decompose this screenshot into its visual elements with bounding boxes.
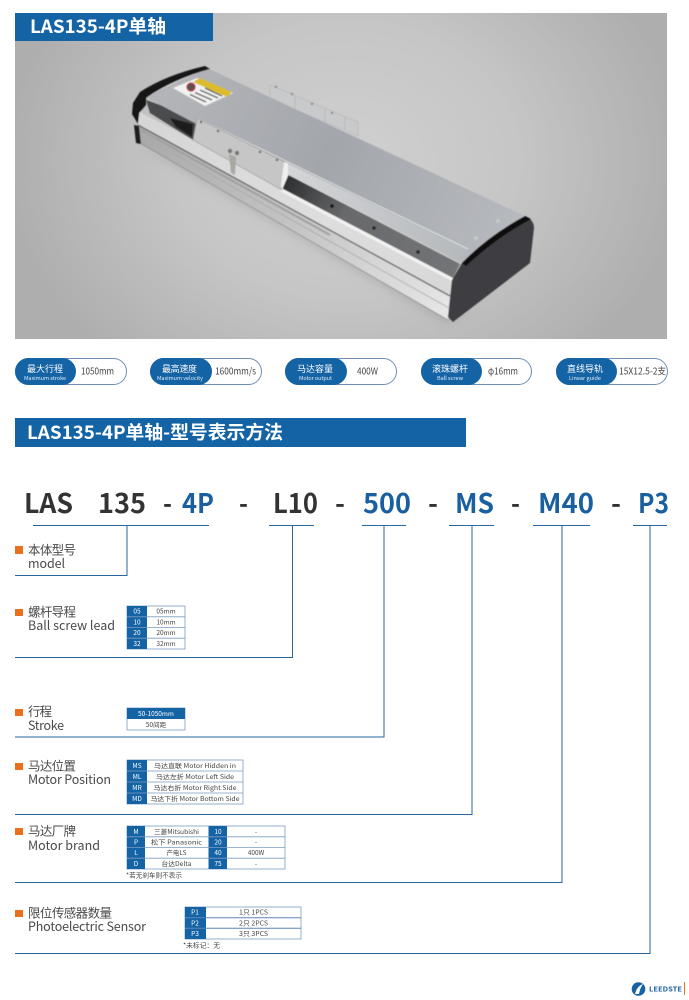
- spec pill: maximum stroke: [15, 358, 126, 385]
- table: ball screw lead: 10: [133, 616, 141, 626]
- spec pill: linear guide: Linear guide: [569, 374, 601, 382]
- table: motor brand: -: [255, 826, 257, 836]
- table: motor brand: 75: [214, 858, 222, 868]
- item: motor brand: [15, 820, 100, 854]
- item: motor position: 马达位置: [28, 756, 76, 774]
- spec pill: maximum velocity: 1600mm/s: [215, 364, 256, 378]
- leader line: ball screw lead: [15, 526, 314, 658]
- table: motor position: MD: [132, 793, 142, 803]
- model code line: -: [428, 482, 438, 521]
- item: stroke: Stroke: [28, 715, 64, 734]
- spec pill: maximum velocity: Maximum velocity: [157, 374, 203, 382]
- table: stroke: [127, 708, 185, 730]
- heading: product title: [15, 13, 213, 41]
- item: stroke: 行程: [28, 701, 52, 720]
- spec pill: ball screw: φ16mm: [488, 364, 518, 378]
- table: motor brand: 产电LS: [166, 847, 187, 857]
- spec pill: motor output: 400W: [357, 364, 379, 378]
- table: photoelectric sensor: P2: [191, 917, 199, 927]
- table: motor brand: P: [134, 836, 138, 846]
- leader line: photoelectric sensor: [15, 526, 667, 954]
- spec pill: maximum velocity: 最高速度: [162, 362, 197, 375]
- heading: product title: LAS135-4P单轴: [30, 13, 166, 39]
- note: sensor unmarked: *未标记：无: [183, 940, 221, 950]
- spec pill: motor output: [285, 358, 396, 385]
- model code line: MS: [455, 482, 494, 521]
- spec pill: maximum stroke: Maximum stroke: [24, 374, 66, 382]
- leader line: stroke: [15, 526, 406, 737]
- table: ball screw lead: [127, 606, 185, 649]
- item: ball screw lead: [15, 602, 115, 634]
- table: ball screw lead: 05: [133, 606, 141, 616]
- spec pill: ball screw: Ball screw: [437, 374, 464, 382]
- table: motor position: 马达左折 Motor Left Side: [156, 771, 234, 781]
- item: ball screw lead: Ball screw lead: [28, 615, 115, 634]
- item: motor brand: Motor brand: [28, 835, 100, 854]
- model code line: LAS: [24, 482, 73, 521]
- table: ball screw lead: 32mm: [156, 638, 176, 648]
- table: motor brand: 400W: [248, 847, 265, 857]
- item: motor position: Motor Position: [28, 769, 111, 788]
- item: motor position: [15, 756, 111, 788]
- panel: product photo: [15, 13, 667, 339]
- model code line: 135: [98, 482, 146, 521]
- model code line: -: [611, 482, 621, 521]
- leader line: model: [15, 526, 209, 576]
- table: ball screw lead: 05mm: [156, 606, 176, 616]
- table: ball screw lead: 10mm: [156, 616, 176, 626]
- table: motor brand: [127, 826, 285, 869]
- table: stroke: 50-1050mm: [138, 708, 174, 718]
- item: stroke: [15, 701, 64, 734]
- table: photoelectric sensor: P3: [191, 928, 199, 938]
- heading: model notation: LAS135-4P单轴-型号表示方法: [27, 419, 283, 445]
- spec pill: ball screw: 滚珠螺杆: [432, 362, 468, 375]
- spec pill: motor output: Motor output: [299, 374, 332, 382]
- table: photoelectric sensor: P1: [191, 907, 199, 917]
- table: motor position: [127, 760, 243, 804]
- table: motor position: 马达下折 Motor Bottom Side: [150, 793, 240, 803]
- table: motor brand: 20: [214, 836, 222, 846]
- logo: LEEDSTE: [632, 982, 685, 996]
- model code line: -: [335, 482, 345, 521]
- item: model: model: [28, 553, 65, 572]
- item: motor brand: 马达厂牌: [28, 820, 76, 840]
- table: motor position: MR: [132, 782, 142, 792]
- model code line: -: [511, 482, 520, 521]
- table: motor brand: 松下 Panasonic: [151, 836, 203, 846]
- model code line: P3: [638, 482, 669, 521]
- table: ball screw lead: 20mm: [156, 627, 176, 637]
- table: motor brand: 三菱Mitsubishi: [154, 826, 199, 836]
- table: motor position: 马达直联 Motor Hidden in: [154, 760, 236, 770]
- table: motor brand: 台达Delta: [162, 858, 192, 868]
- model code line: -: [163, 482, 172, 521]
- item: ball screw lead: 螺杆导程: [28, 602, 76, 620]
- spec pill: motor output: 马达容量: [297, 362, 333, 375]
- table: ball screw lead: 20: [133, 627, 141, 637]
- table: motor brand: L: [134, 847, 138, 857]
- leader line: motor position: [15, 526, 494, 814]
- heading: model notation: [15, 418, 466, 447]
- item: model: [15, 540, 76, 572]
- table: photoelectric sensor: 1只 1PCS: [239, 907, 268, 917]
- model code line: M40: [538, 482, 594, 521]
- item: model: 本体型号: [28, 540, 76, 558]
- table: motor position: ML: [133, 771, 142, 781]
- logo: LEEDSTE: LEEDSTE: [649, 984, 682, 994]
- table: motor brand: M: [133, 826, 139, 836]
- model code line: L10: [273, 482, 318, 521]
- spec pill: linear guide: [556, 358, 668, 385]
- spec pill: linear guide: 15X12.5-2支: [619, 364, 666, 378]
- table: motor position: 马达右折 Motor Right Side: [154, 782, 237, 792]
- table: motor position: MS: [132, 760, 142, 770]
- table: motor brand: 40: [214, 847, 222, 857]
- table: motor brand: D: [134, 858, 139, 868]
- note: motor brake: *若无刹车则不表示: [126, 870, 182, 880]
- model code line: 500: [363, 482, 411, 521]
- item: photoelectric sensor: 限位传感器数量: [28, 902, 112, 922]
- table: ball screw lead: 32: [133, 638, 141, 648]
- leader line: motor brand: [15, 526, 590, 882]
- model code line: [24, 482, 669, 521]
- product: linear actuator module: [132, 66, 534, 324]
- table: motor brand: 10: [214, 826, 222, 836]
- spec pill: maximum velocity: [150, 358, 262, 385]
- table: motor brand: -: [255, 836, 257, 846]
- spec pill: ball screw: [421, 358, 532, 385]
- spec pill: maximum stroke: 1050mm: [81, 364, 114, 378]
- table: photoelectric sensor: 2只 2PCS: [239, 917, 268, 927]
- table: motor brand: -: [255, 858, 257, 868]
- item: photoelectric sensor: Photoelectric Sensor: [28, 916, 146, 935]
- item: photoelectric sensor: [15, 902, 146, 935]
- model code line: -: [239, 482, 248, 521]
- spec pill: maximum stroke: 最大行程: [27, 362, 63, 375]
- table: stroke: 50间距: [146, 719, 167, 729]
- table: photoelectric sensor: [185, 907, 301, 939]
- table: photoelectric sensor: 3只 3PCS: [239, 928, 268, 938]
- spec pill: linear guide: 直线导轨: [567, 362, 603, 375]
- model code line: 4P: [182, 482, 214, 521]
